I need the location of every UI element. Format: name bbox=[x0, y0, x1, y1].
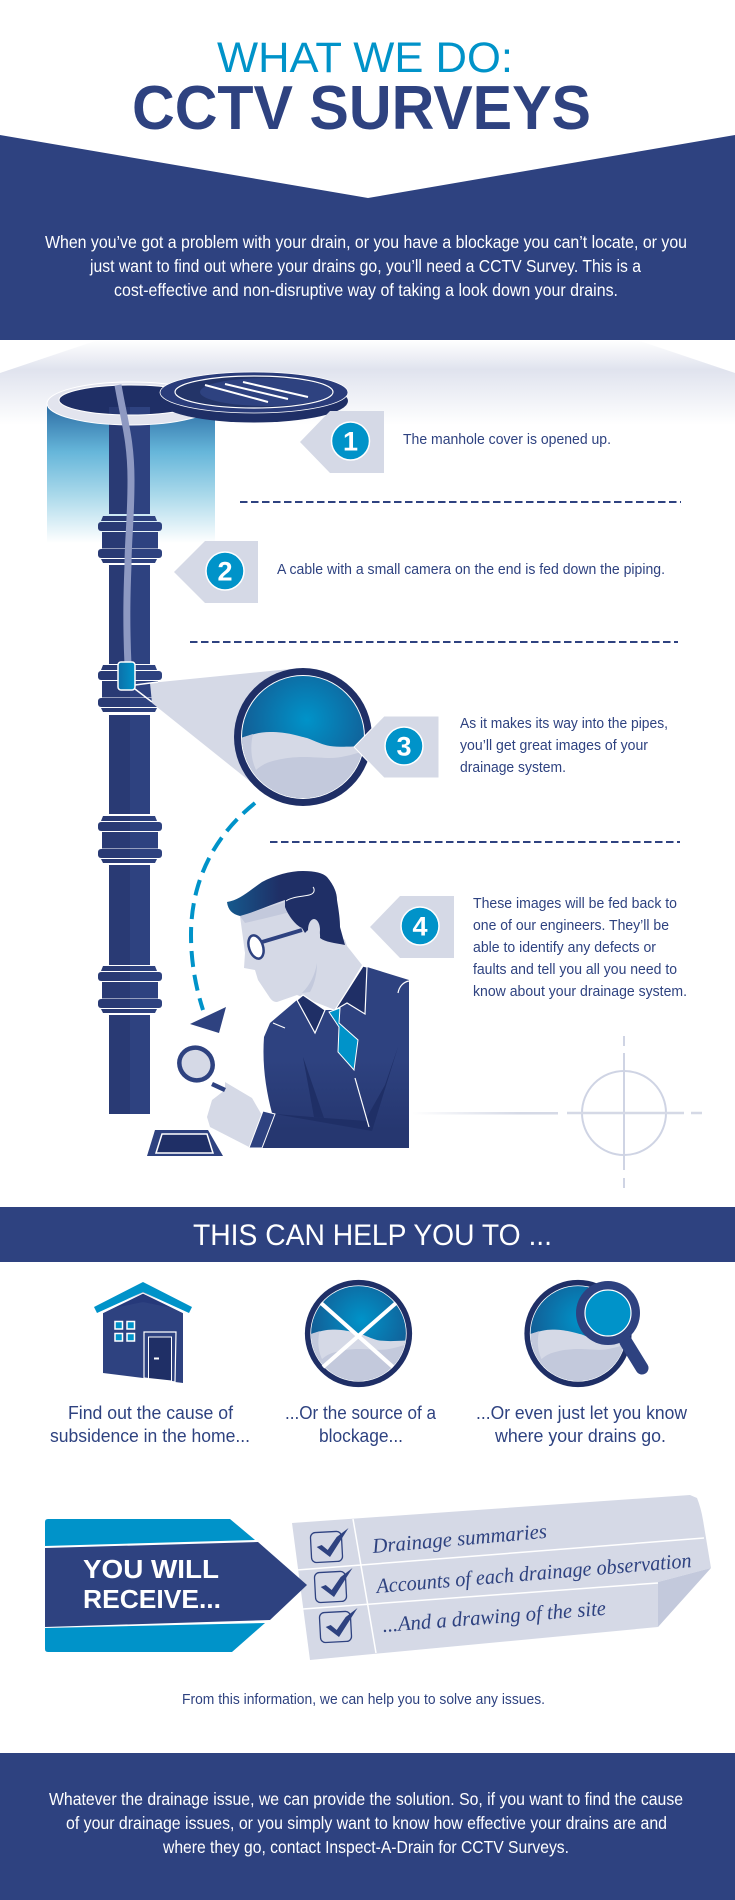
step 3 camera view bbox=[118, 662, 372, 807]
manhole cover bbox=[160, 372, 348, 422]
badge 2: 2 bbox=[217, 556, 233, 586]
suit highlights bbox=[273, 981, 409, 1127]
tie bbox=[329, 1008, 358, 1070]
badge 4: 4 bbox=[412, 912, 428, 942]
badge 2 bbox=[174, 541, 258, 603]
step 3 callout bbox=[354, 716, 668, 778]
panel: this can help you bbox=[0, 1207, 735, 1262]
footer text: of your drainage issues, or you simply want to know how effective your drains are and bbox=[66, 1813, 667, 1833]
checklist items bbox=[370, 1519, 692, 1637]
manhole shaft bbox=[47, 403, 215, 543]
footer text: Whatever the drainage issue, we can provide the solution. So, if you want to find the cause bbox=[49, 1789, 683, 1809]
roof shadow bbox=[114, 1293, 172, 1308]
tag text bbox=[83, 1554, 221, 1614]
benefit texts: where your drains go. bbox=[494, 1426, 666, 1446]
checklist items: Accounts of each drainage observation bbox=[374, 1548, 692, 1598]
footer band bbox=[0, 1753, 735, 1900]
panel: pipe illustration bbox=[47, 372, 348, 1114]
step 3 text: drainage system. bbox=[460, 760, 566, 776]
hair bbox=[227, 871, 345, 945]
suit bbox=[250, 967, 409, 1148]
benefit texts: ...Or even just let you know bbox=[476, 1403, 688, 1423]
cuff bbox=[249, 1111, 275, 1148]
band bbox=[0, 1207, 735, 1262]
tag arrow bbox=[45, 1542, 307, 1627]
house body bbox=[103, 1292, 183, 1383]
step 2 callout bbox=[174, 541, 665, 603]
manhole opening bbox=[59, 385, 203, 415]
intro text: cost-effective and non-disruptive way of taking a look down your drains. bbox=[114, 280, 618, 300]
glasses bbox=[246, 930, 302, 961]
text: from this information: From this information, we can help you to solve any issues. bbox=[182, 1692, 545, 1708]
title bbox=[132, 34, 591, 143]
intro text bbox=[45, 232, 687, 300]
tablet bbox=[147, 1130, 223, 1156]
floor shading bbox=[0, 341, 735, 425]
camera lens view bbox=[234, 668, 372, 807]
badge 3 bbox=[354, 716, 439, 778]
band background bbox=[0, 135, 735, 340]
badge 1 bbox=[300, 411, 384, 473]
benefit texts bbox=[50, 1403, 688, 1446]
step 4 callout bbox=[370, 896, 687, 1000]
step 4 text: know about your drainage system. bbox=[473, 984, 687, 1000]
door bbox=[144, 1332, 176, 1382]
camera bbox=[118, 662, 135, 690]
step 3 text: As it makes its way into the pipes, bbox=[460, 716, 668, 732]
step 4 text: one of our engineers. They’ll be bbox=[473, 918, 669, 934]
intro text: When you’ve got a problem with your drain, or you have a blockage you can’t locate, or you bbox=[45, 232, 687, 252]
step 3 text: you’ll get great images of your bbox=[460, 738, 648, 754]
heading: THIS CAN HELP YOU TO ... bbox=[193, 1219, 552, 1252]
icon: blocked lens bbox=[305, 1280, 412, 1388]
tag bottom bbox=[45, 1623, 265, 1652]
paper bbox=[292, 1495, 711, 1660]
checklist items: Drainage summaries bbox=[370, 1519, 548, 1558]
arrow: dashed arc to engineer bbox=[190, 803, 255, 1033]
collars bbox=[297, 966, 367, 1033]
face and neck bbox=[240, 900, 362, 1010]
crosshair bbox=[412, 1036, 702, 1188]
step 3 text bbox=[460, 716, 668, 776]
hand bbox=[207, 1082, 263, 1147]
tag top bbox=[45, 1519, 255, 1546]
icon: lens with magnifier bbox=[524, 1280, 642, 1388]
panel: intro band bbox=[0, 135, 735, 340]
benefit texts: subsidence in the home... bbox=[50, 1426, 250, 1446]
tag text: RECEIVE... bbox=[83, 1584, 221, 1614]
manhole rim bbox=[47, 382, 215, 425]
tag text: YOU WILL bbox=[83, 1554, 219, 1584]
step 1 text: The manhole cover is opened up. bbox=[403, 432, 611, 448]
badge 3: 3 bbox=[396, 732, 412, 762]
heading: what we do: WHAT WE DO: bbox=[217, 34, 513, 82]
step 4 text bbox=[473, 896, 687, 1000]
roof bbox=[94, 1282, 192, 1313]
panel: you will receive bbox=[45, 1519, 307, 1652]
badge 4 bbox=[370, 896, 454, 958]
view cone bbox=[150, 668, 300, 783]
step 4 text: faults and tell you all you need to bbox=[473, 962, 677, 978]
step 4 text: able to identify any defects or bbox=[473, 940, 656, 956]
icon: house bbox=[94, 1282, 192, 1383]
icon: engineer bbox=[147, 871, 409, 1156]
magnifying glass bbox=[173, 1041, 225, 1090]
step 1 callout bbox=[300, 411, 611, 473]
windows bbox=[115, 1322, 134, 1341]
paper fold bbox=[658, 1568, 711, 1627]
suit shadows bbox=[275, 1047, 398, 1131]
couplers bbox=[98, 516, 162, 1013]
pipe bbox=[109, 407, 150, 1114]
forehead shade bbox=[240, 902, 290, 923]
panel: footer bbox=[0, 1753, 735, 1900]
panel: checklist bbox=[292, 1495, 711, 1660]
step 4 text: These images will be fed back to bbox=[473, 896, 677, 912]
checklist items: ...And a drawing of the site bbox=[382, 1596, 607, 1637]
footer text: where they go, contact Inspect-A-Drain for CCTV Surveys. bbox=[162, 1837, 569, 1857]
checkboxes bbox=[310, 1528, 358, 1643]
neck shade bbox=[302, 963, 317, 993]
benefit texts: ...Or the source of a bbox=[285, 1403, 437, 1423]
heading: cctv surveys: CCTV SURVEYS bbox=[132, 74, 591, 143]
ear bbox=[308, 919, 320, 941]
step 2 text: A cable with a small camera on the end is fed down the piping. bbox=[277, 562, 665, 578]
benefit texts: blockage... bbox=[319, 1426, 403, 1446]
badge 1: 1 bbox=[343, 426, 358, 456]
benefit texts: Find out the cause of bbox=[68, 1403, 234, 1423]
cable bbox=[118, 385, 131, 665]
intro text: just want to find out where your drains go, you’ll need a CCTV Survey. This is a bbox=[89, 256, 641, 276]
footer text bbox=[49, 1789, 683, 1857]
